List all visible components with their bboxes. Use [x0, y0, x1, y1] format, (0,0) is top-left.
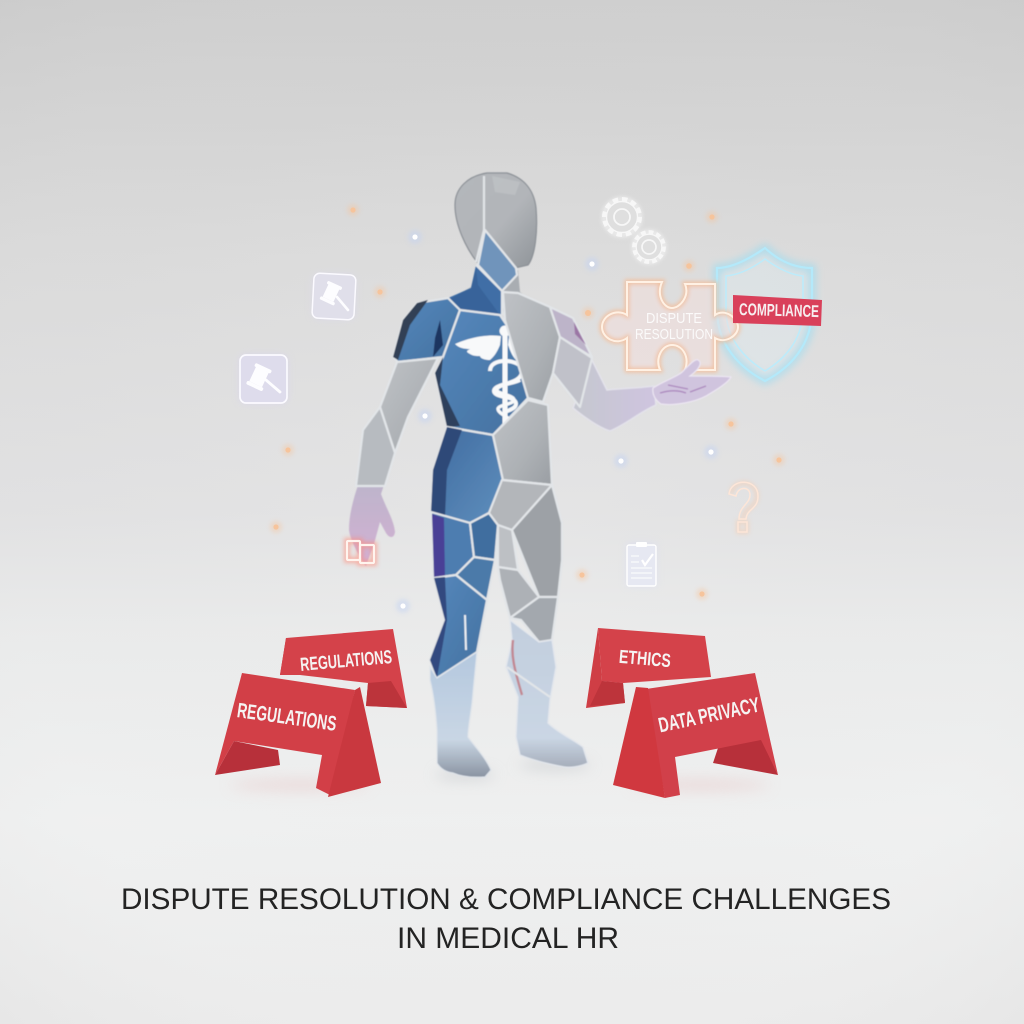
- title: DISPUTE RESOLUTION & COMPLIANCE CHALLENGES: [121, 883, 891, 916]
- barrier: regulations back: [280, 629, 407, 708]
- right chest: [503, 292, 560, 402]
- label: ETHICS: [618, 647, 672, 672]
- floor shadows: [230, 760, 770, 790]
- label: DATA PRIVACY: [656, 694, 762, 737]
- icon: glowing squares at hand: [347, 541, 374, 563]
- neck grey: [500, 270, 528, 322]
- figure: translucent medical human: [349, 173, 731, 777]
- right shoulder: [550, 307, 592, 357]
- left leg panels: [430, 512, 498, 678]
- barrier: ethics back: [586, 628, 711, 708]
- icon: shield: [717, 248, 812, 381]
- label: REGULATIONS: [236, 699, 338, 736]
- icon: puzzle piece with label: [602, 282, 738, 370]
- title: [121, 883, 891, 955]
- left upper arm: [380, 358, 438, 453]
- right shin and foot: [506, 620, 588, 767]
- left boot: [430, 652, 491, 777]
- compliance tag: COMPLIANCE: [739, 300, 819, 321]
- icon: gavel badge lower: [240, 355, 287, 403]
- icon: clipboard: [627, 542, 656, 586]
- puzzle text: RESOLUTION: [635, 326, 713, 343]
- left hand (purple): [349, 482, 395, 566]
- left forearm: [356, 407, 395, 486]
- right thigh panels: [489, 480, 562, 642]
- torso blue with caduceus: [435, 310, 553, 435]
- title: IN MEDICAL HR: [397, 922, 619, 955]
- puzzle text: [635, 310, 713, 343]
- icon: gavel badge upper: [312, 273, 356, 320]
- right forearm and hand: [573, 360, 731, 431]
- abdomen blue: [431, 427, 503, 523]
- compliance tag: [733, 295, 822, 326]
- puzzle text: DISPUTE: [646, 310, 702, 327]
- icon: question mark: [729, 482, 758, 532]
- label: REGULATIONS: [299, 647, 393, 676]
- abdomen grey: [493, 400, 552, 485]
- barrier: data privacy front: [613, 673, 778, 798]
- left shoulder: [393, 298, 460, 362]
- icon: gears: [604, 199, 664, 262]
- face and neck blue panel: [448, 230, 517, 315]
- caduceus emblem: [455, 326, 553, 430]
- floating glow particles: [270, 204, 785, 613]
- head: [455, 173, 537, 268]
- barrier: regulations front: [215, 673, 381, 797]
